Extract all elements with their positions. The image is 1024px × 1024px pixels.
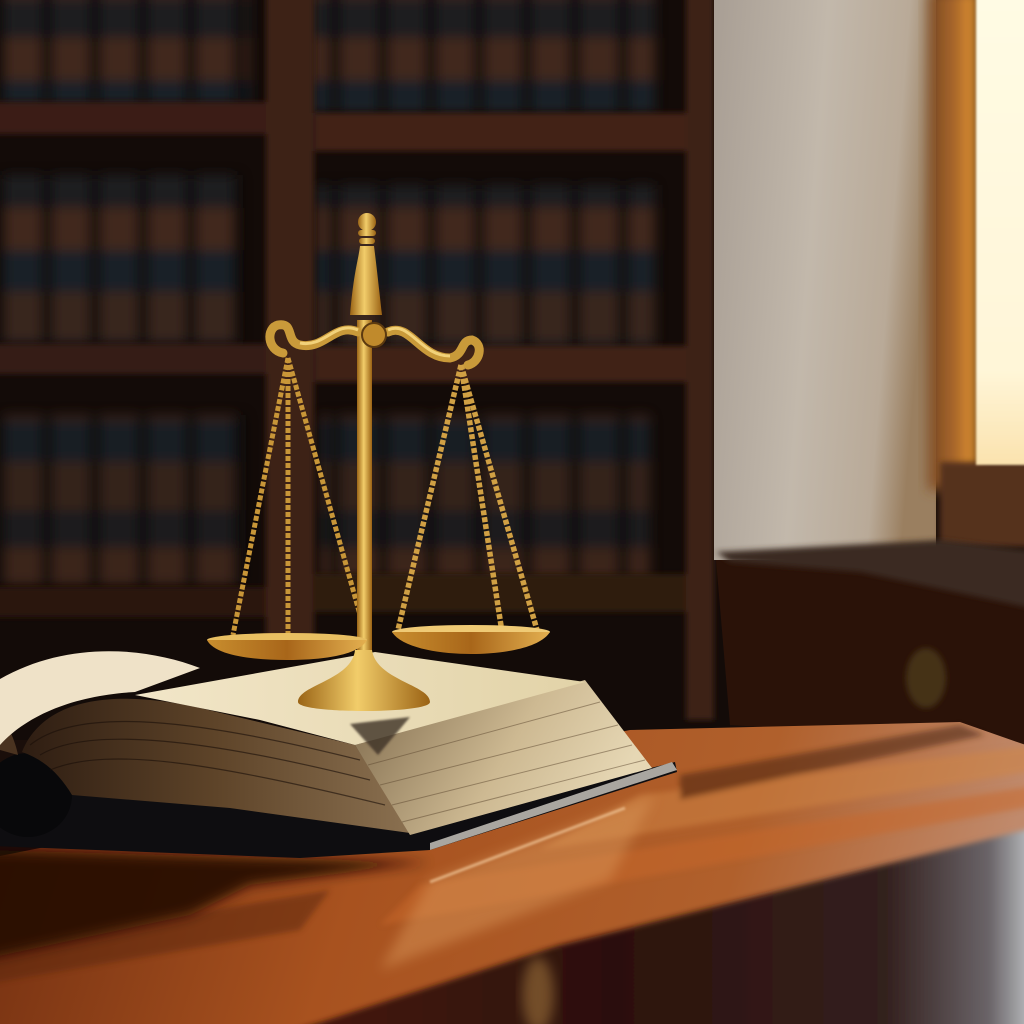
window reflection bbox=[380, 795, 655, 970]
column bbox=[357, 320, 372, 660]
highlight line bbox=[430, 808, 625, 882]
table bbox=[0, 722, 1024, 1024]
window frame bbox=[928, 0, 1024, 547]
cabinet bbox=[716, 540, 1024, 745]
cover bbox=[0, 762, 677, 858]
left pan bbox=[207, 633, 367, 660]
books: top row bbox=[0, 0, 655, 113]
right pan bbox=[392, 625, 550, 654]
book shadow bbox=[0, 850, 430, 960]
top page left bbox=[0, 651, 200, 745]
left page stripes bbox=[30, 721, 385, 805]
right page stripes bbox=[368, 702, 645, 822]
bookshelf background bbox=[0, 0, 730, 740]
finial bbox=[350, 213, 382, 315]
beam bbox=[270, 325, 479, 365]
books: bottom row bbox=[0, 415, 650, 585]
sliver of left page edge bbox=[0, 715, 18, 755]
left chains bbox=[233, 358, 366, 638]
window light bbox=[976, 0, 1024, 465]
pivot bbox=[362, 323, 386, 347]
dark reflection lower right bbox=[250, 825, 1024, 1024]
open book bbox=[0, 651, 677, 858]
page shadow bbox=[350, 717, 410, 755]
right page block bbox=[355, 680, 652, 835]
balance scale bbox=[207, 213, 550, 711]
right chains bbox=[398, 365, 537, 632]
shelf boards bbox=[0, 0, 714, 720]
wood grain bbox=[0, 725, 1024, 985]
base bbox=[298, 650, 430, 711]
top page right bbox=[135, 652, 585, 745]
left page side bbox=[22, 699, 410, 833]
books: middle row bbox=[0, 175, 655, 350]
wall bbox=[714, 0, 936, 560]
